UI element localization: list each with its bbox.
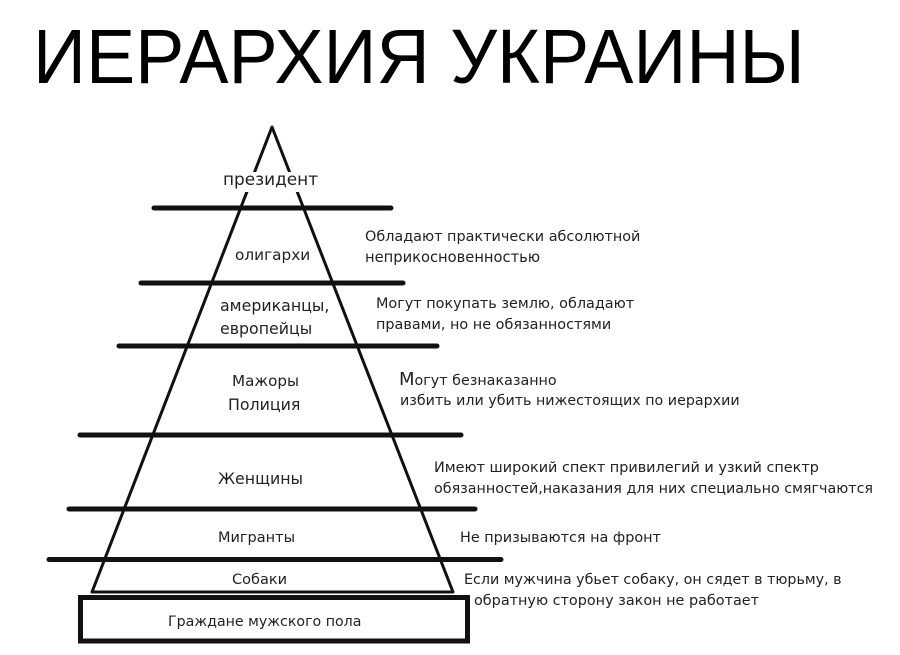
base label: male citizens: Граждане мужского пола xyxy=(168,614,361,630)
title: ИЕРАРХИЯ УКРАИНЫ xyxy=(33,13,805,99)
base box xyxy=(80,598,468,641)
tier label: majors and police: Полиция xyxy=(228,395,300,414)
note: americans, europeans xyxy=(376,296,634,333)
tier label: oligarchs: олигархи xyxy=(235,246,310,264)
note: oligarchs xyxy=(365,229,640,266)
tier label: president: президент xyxy=(223,169,318,189)
tier label: women: Женщины xyxy=(218,469,303,488)
note: dogs xyxy=(464,572,842,608)
tier label: dogs: Собаки xyxy=(232,572,287,588)
note: majors and police: избить или убить нижестоящих по иерархии xyxy=(400,393,740,409)
tier label: americans, europeans xyxy=(220,296,329,338)
tier label: majors and police xyxy=(228,372,300,414)
pyramid outline xyxy=(92,127,453,592)
note: americans, europeans: Могут покупать землю, обладают xyxy=(376,296,634,312)
tier label: americans, europeans: американцы, xyxy=(220,296,329,315)
tier label: migrants: Мигранты xyxy=(218,530,295,546)
note: women xyxy=(434,460,873,497)
tier label: majors and police: Мажоры xyxy=(232,372,299,390)
note: migrants: Не призываются на фронт xyxy=(460,530,661,546)
tier label: americans, europeans: европейцы xyxy=(220,318,312,338)
note: dogs: Если мужчина убьет собаку, он сядет в тюрьму, в xyxy=(464,572,842,588)
note: women: Имеют широкий спект привилегий и узкий спектр xyxy=(434,460,819,476)
note: dogs: обратную сторону закон не работает xyxy=(474,592,759,608)
note: oligarchs: неприкосновенностью xyxy=(365,248,540,266)
note: oligarchs: Обладают практически абсолютной xyxy=(365,229,640,245)
note: majors and police xyxy=(399,369,740,409)
note: americans, europeans: правами, но не обязанностями xyxy=(376,317,611,333)
tier dividers xyxy=(49,208,501,560)
note: majors and police: Могут безнаказанно xyxy=(399,369,557,390)
note: women: обязанностей,наказания для них специально смягчаются xyxy=(434,481,873,497)
